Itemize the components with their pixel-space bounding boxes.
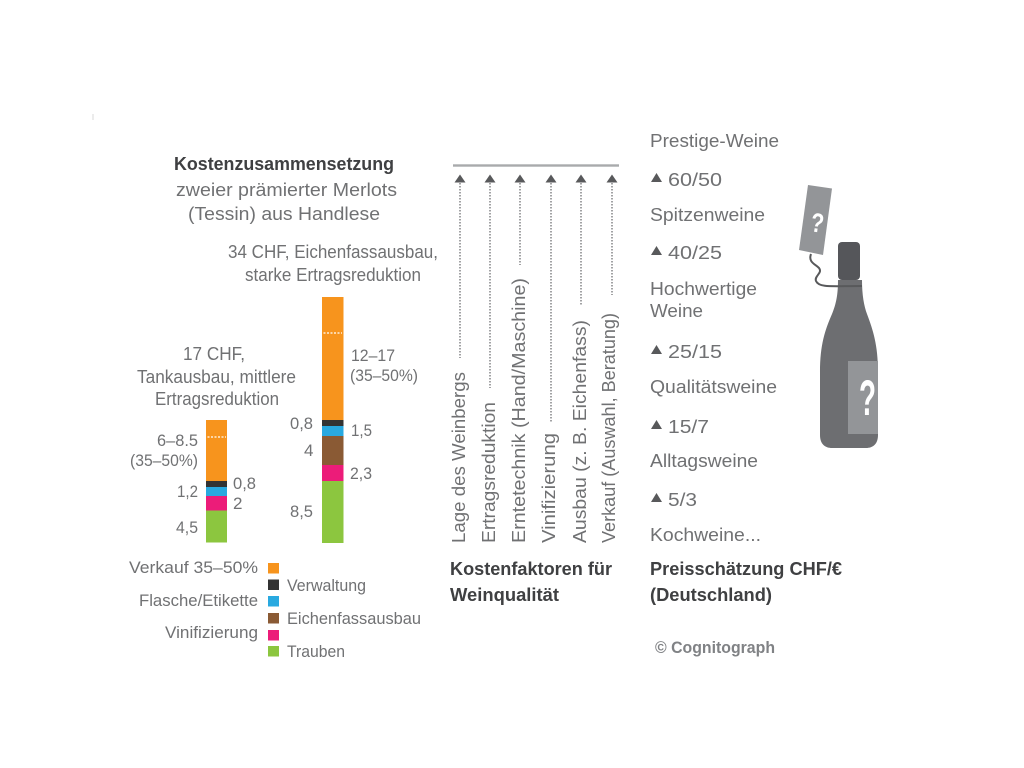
panel: cost composition bbox=[129, 153, 438, 661]
legend: Flasche/Etikette bbox=[139, 591, 258, 610]
top rule bbox=[453, 164, 619, 167]
panel: cost factors bbox=[448, 164, 619, 605]
values: 34 CHF bar: 1,5 bbox=[351, 421, 372, 440]
values: 17 CHF bar: 1,2 bbox=[177, 482, 198, 501]
values: 17 CHF bar: 6–8.5 bbox=[157, 431, 198, 450]
arrows: cost factors bbox=[454, 174, 618, 422]
price ladder: 40/25 bbox=[668, 242, 722, 263]
legend: Trauben bbox=[287, 642, 345, 661]
values: 34 CHF bar bbox=[290, 346, 418, 521]
icon: bottle with tag: ? bbox=[809, 207, 826, 239]
values: 17 CHF bar: (35–50%) bbox=[130, 451, 198, 470]
legend: Eichenfassausbau bbox=[287, 609, 421, 628]
heading: price estimate: Preisschätzung CHF/€ bbox=[650, 558, 842, 579]
values: 34 CHF bar: (35–50%) bbox=[350, 366, 418, 385]
rotated factor labels bbox=[448, 278, 619, 543]
price ladder: Kochweine... bbox=[650, 524, 761, 545]
legend: Verwaltung bbox=[287, 576, 366, 595]
label: 17 CHF bar bbox=[137, 343, 296, 409]
legend: Vinifizierung bbox=[165, 623, 258, 642]
values: 17 CHF bar bbox=[130, 431, 256, 537]
values: 34 CHF bar: 4 bbox=[304, 441, 313, 460]
heading: cost composition: zweier prämierter Merlots bbox=[176, 179, 397, 200]
price ladder: 25/15 bbox=[668, 341, 722, 362]
rotated factor labels: Lage des Weinbergs bbox=[448, 372, 469, 543]
rotated factor labels: Ertragsreduktion bbox=[478, 402, 499, 543]
heading: price estimate bbox=[650, 558, 842, 605]
price ladder: Weine bbox=[650, 300, 703, 321]
heading: cost factors bbox=[450, 558, 612, 605]
heading: cost factors: Weinqualität bbox=[450, 584, 559, 605]
values: 17 CHF bar: 4,5 bbox=[176, 518, 198, 537]
copyright: © Cognitograph bbox=[655, 638, 775, 657]
values: 17 CHF bar: 2 bbox=[233, 494, 242, 513]
rotated factor labels: Verkauf (Auswahl, Beratung) bbox=[598, 313, 619, 543]
heading: cost composition: Kostenzusammensetzung bbox=[174, 153, 394, 174]
stacked bar: 34 CHF bbox=[322, 297, 344, 543]
price ladder: Qualitätsweine bbox=[650, 376, 777, 397]
stacked bar: 17 CHF bbox=[206, 420, 227, 542]
panel: price estimate bbox=[650, 130, 878, 657]
price ladder: Prestige-Weine bbox=[650, 130, 779, 151]
values: 34 CHF bar: 0,8 bbox=[290, 414, 313, 433]
price ladder: Hochwertige bbox=[650, 278, 757, 299]
label: 17 CHF bar: Tankausbau, mittlere bbox=[137, 366, 296, 387]
legend: Verkauf 35–50% bbox=[129, 558, 258, 577]
label: 34 CHF bar bbox=[228, 241, 438, 285]
small scan mark bbox=[92, 114, 94, 120]
price ladder: Alltagsweine bbox=[650, 450, 758, 471]
price ladder bbox=[650, 130, 779, 545]
heading: cost factors: Kostenfaktoren für bbox=[450, 558, 612, 579]
heading: cost composition bbox=[174, 153, 397, 224]
price ladder: 15/7 bbox=[668, 416, 709, 437]
label: 17 CHF bar: 17 CHF, bbox=[183, 343, 245, 364]
values: 34 CHF bar: 8,5 bbox=[290, 502, 313, 521]
price ladder: Spitzenweine bbox=[650, 204, 765, 225]
rotated factor labels: Erntetechnik (Hand/Maschine) bbox=[508, 278, 529, 543]
icon: bottle with tag bbox=[799, 185, 878, 448]
values: 34 CHF bar: 12–17 bbox=[351, 346, 395, 365]
values: 17 CHF bar: 0,8 bbox=[233, 474, 256, 493]
rotated factor labels: Ausbau (z. B. Eichenfass) bbox=[569, 320, 590, 543]
label: 34 CHF bar: 34 CHF, Eichenfassausbau, bbox=[228, 241, 438, 262]
icon: bottle with tag: ? bbox=[859, 370, 876, 426]
heading: cost composition: (Tessin) aus Handlese bbox=[188, 203, 380, 224]
values: 34 CHF bar: 2,3 bbox=[350, 464, 372, 483]
label: 34 CHF bar: starke Ertragsreduktion bbox=[245, 264, 421, 285]
price ladder: 5/3 bbox=[668, 489, 697, 510]
rotated factor labels: Vinifizierung bbox=[538, 433, 559, 543]
legend bbox=[129, 558, 421, 661]
price ladder: 60/50 bbox=[668, 169, 722, 190]
label: 17 CHF bar: Ertragsreduktion bbox=[155, 388, 279, 409]
heading: price estimate: (Deutschland) bbox=[650, 584, 772, 605]
